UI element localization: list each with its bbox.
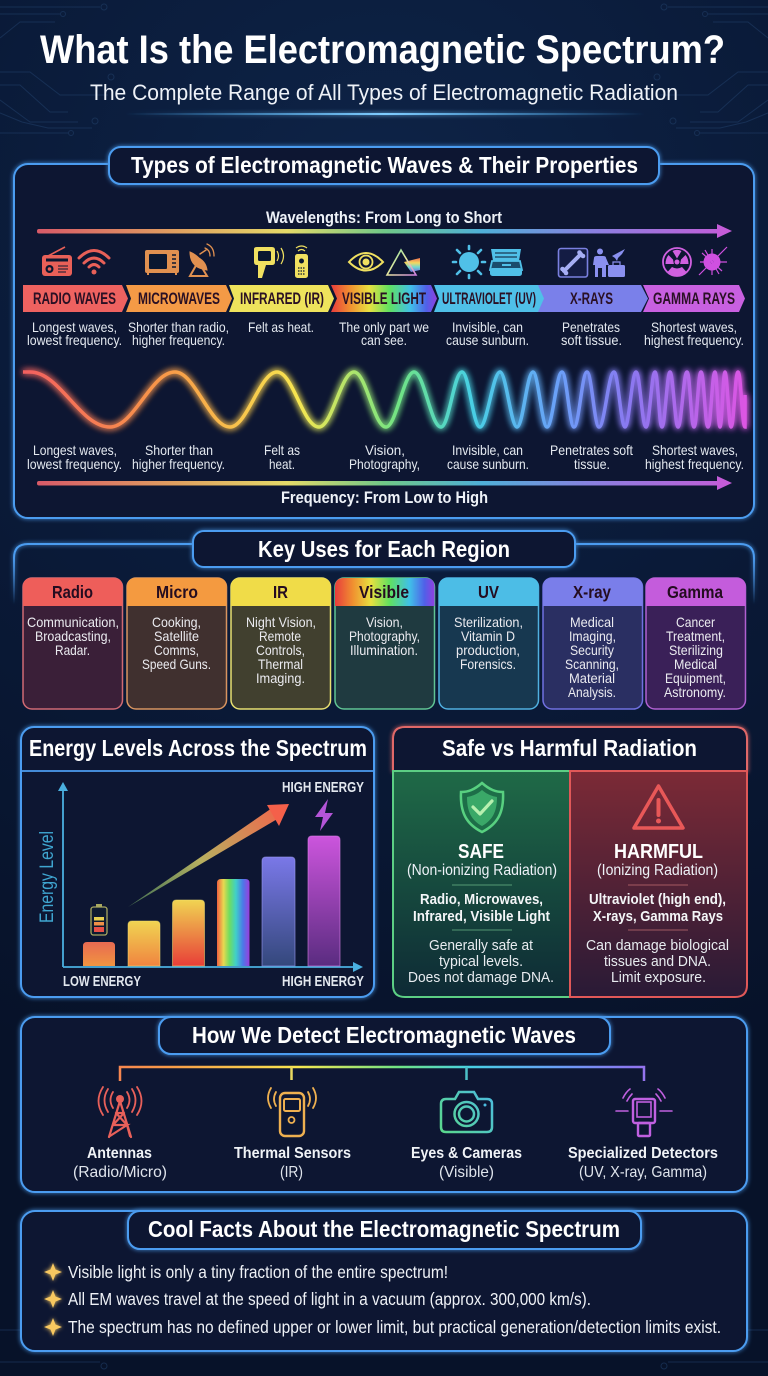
card: infrared: Imaging. bbox=[256, 670, 305, 686]
icon: thermal sensor bbox=[268, 1088, 316, 1136]
rising energy arrow bbox=[128, 804, 289, 907]
spectrum band: x-rays: X-RAYS bbox=[570, 290, 613, 308]
heading: key uses bbox=[193, 531, 575, 567]
spectrum band: microwaves: MICROWAVES bbox=[138, 290, 220, 308]
lower wave descriptions: cause sunburn. bbox=[447, 457, 529, 472]
icon: airport security traveller bbox=[593, 248, 625, 277]
detector: specialized detectors: (UV, X-ray, Gamma) bbox=[579, 1164, 707, 1181]
heading: cool facts: Cool Facts About the Electromagnetic Spectrum bbox=[148, 1216, 620, 1242]
lower wave descriptions: Shortest waves, bbox=[652, 443, 738, 458]
fact one: Visible light is only a tiny fraction of the entire spectrum! bbox=[68, 1262, 448, 1282]
card: uv: production, bbox=[456, 642, 520, 658]
upper wave descriptions: higher frequency. bbox=[132, 333, 225, 348]
upper wave descriptions: The only part we bbox=[339, 320, 429, 335]
bar: infrared bbox=[172, 900, 204, 966]
bar: uv and x-ray bbox=[262, 857, 295, 966]
icon: gamma burst bbox=[699, 247, 727, 275]
icon: infrared camera bbox=[254, 247, 284, 278]
card: radio: Radio bbox=[52, 582, 93, 602]
detector: antennas bbox=[73, 1087, 167, 1181]
card: gamma: Treatment, bbox=[666, 628, 725, 644]
column: harmful: X-rays, Gamma Rays bbox=[593, 908, 723, 925]
lower wave descriptions: Longest waves, bbox=[33, 443, 117, 458]
lower wave descriptions: higher frequency. bbox=[132, 457, 225, 472]
upper wave descriptions: Penetrates bbox=[562, 320, 620, 335]
card: radio: Communication, bbox=[27, 614, 119, 630]
bar: radio bbox=[83, 942, 115, 966]
column: safe: Radio, Microwaves, bbox=[420, 891, 543, 908]
bar: visible bbox=[217, 879, 250, 966]
label: low energy: LOW ENERGY bbox=[63, 973, 141, 990]
card: infrared: Remote bbox=[259, 628, 301, 644]
card: x-ray: Scanning, bbox=[565, 656, 619, 672]
card: uv: Vitamin D bbox=[461, 628, 515, 644]
card: infrared: Night Vision, bbox=[246, 614, 316, 630]
column: harmful: HARMFUL bbox=[614, 840, 703, 863]
spectrum band: radio waves bbox=[23, 285, 128, 312]
title: What Is the Electromagnetic Spectrum? bbox=[40, 28, 725, 72]
heading: energy levels: Energy Levels Across the Spectrum bbox=[29, 735, 367, 761]
card: infrared: IR bbox=[273, 582, 288, 602]
spectrum band: x-rays bbox=[538, 285, 648, 312]
heading: safe vs harmful: Safe vs Harmful Radiation bbox=[442, 735, 697, 761]
card: infrared: Thermal bbox=[258, 656, 303, 672]
spectrum band: infrared bbox=[229, 285, 334, 312]
card: visible bbox=[335, 578, 434, 709]
icon: prism bbox=[387, 250, 420, 275]
spectrum band: gamma rays bbox=[643, 285, 745, 312]
lower wave descriptions bbox=[27, 443, 744, 472]
card: visible: Vision, bbox=[366, 614, 403, 630]
card: x-ray: Imaging, bbox=[569, 628, 616, 644]
upper wave descriptions: lowest frequency. bbox=[27, 333, 122, 348]
panel: energy levels bbox=[21, 727, 374, 997]
bar: micro bbox=[128, 921, 160, 966]
icon: satellite dish bbox=[190, 244, 214, 276]
card: uv bbox=[439, 578, 538, 709]
card: x-ray: Security bbox=[570, 642, 614, 658]
card: x-ray: X-ray bbox=[573, 582, 611, 602]
lower wave descriptions: Felt as bbox=[264, 443, 300, 458]
upper wave descriptions: Shortest waves, bbox=[651, 320, 737, 335]
spectrum band: gamma rays: GAMMA RAYS bbox=[653, 290, 735, 308]
card: visible: Visible bbox=[359, 582, 409, 602]
spectrum band: infrared: INFRARED (IR) bbox=[240, 290, 324, 308]
spectrum band: visible light: VISIBLE LIGHT bbox=[342, 290, 426, 308]
icon: wifi bbox=[79, 250, 109, 274]
card: x-ray bbox=[543, 578, 642, 709]
card: gamma: Cancer bbox=[676, 614, 715, 630]
column: harmful: (Ionizing Radiation) bbox=[597, 862, 718, 879]
upper wave descriptions: Shorter than radio, bbox=[128, 320, 229, 335]
card: gamma bbox=[646, 578, 746, 709]
icon: shield bbox=[461, 783, 503, 832]
icon: battery bbox=[91, 904, 107, 935]
detector: thermal sensors: Thermal Sensors bbox=[234, 1145, 351, 1162]
lower wave descriptions: Penetrates soft bbox=[550, 443, 633, 458]
spectrum band: ultraviolet: ULTRAVIOLET (UV) bbox=[442, 290, 536, 308]
icon: camera bbox=[441, 1092, 492, 1132]
lower wave descriptions: highest frequency. bbox=[645, 457, 744, 472]
circuit decoration left bbox=[0, 4, 114, 1369]
title divider bbox=[125, 113, 645, 115]
lower wave descriptions: heat. bbox=[269, 457, 295, 472]
card: gamma: Equipment, bbox=[665, 670, 726, 686]
card: uv: Sterilization, bbox=[454, 614, 523, 630]
upper wave descriptions: cause sunburn. bbox=[446, 333, 529, 348]
detector: thermal sensors bbox=[234, 1088, 351, 1181]
wave chart bbox=[23, 372, 745, 427]
card: micro: Comms, bbox=[154, 642, 199, 658]
panel: detection bbox=[21, 1017, 747, 1192]
panel: types of waves bbox=[14, 147, 754, 518]
wavelength arrow bbox=[37, 224, 732, 238]
card: micro: Micro bbox=[156, 582, 198, 602]
lower wave descriptions: Photography, bbox=[349, 457, 420, 472]
column: harmful: Ultraviolet (high end), bbox=[589, 891, 726, 908]
heading: types of waves bbox=[109, 147, 659, 184]
lower wave descriptions: lowest frequency. bbox=[27, 457, 122, 472]
bar: gamma bbox=[308, 836, 340, 966]
card: gamma: Gamma bbox=[667, 582, 723, 602]
wavelength label: Wavelengths: From Long to Short bbox=[266, 209, 502, 227]
icon: specialized detector bbox=[616, 1089, 672, 1136]
detector: eyes and cameras bbox=[411, 1092, 522, 1181]
spectrum band: radio waves: RADIO WAVES bbox=[33, 290, 116, 308]
upper wave descriptions: soft tissue. bbox=[561, 333, 622, 348]
axes bbox=[58, 782, 363, 972]
heading: detection: How We Detect Electromagnetic Waves bbox=[192, 1022, 576, 1048]
column: safe bbox=[393, 771, 570, 997]
card: radio bbox=[23, 578, 122, 709]
spectrum band: microwaves bbox=[126, 285, 232, 312]
label: high energy bottom: HIGH ENERGY bbox=[282, 973, 364, 990]
detector: eyes and cameras: (Visible) bbox=[439, 1164, 494, 1181]
connector bracket bbox=[120, 1067, 644, 1081]
icon: warning triangle bbox=[634, 786, 683, 828]
frequency label: Frequency: From Low to High bbox=[281, 489, 488, 507]
upper wave descriptions: highest frequency. bbox=[644, 333, 744, 348]
card: micro: Speed Guns. bbox=[142, 656, 211, 672]
subtitle: The Complete Range of All Types of Electromagnetic Radiation bbox=[90, 80, 678, 105]
detector: antennas: (Radio/Micro) bbox=[73, 1164, 167, 1181]
column: safe: Infrared, Visible Light bbox=[413, 908, 550, 925]
card: uv: Forensics. bbox=[460, 656, 516, 672]
card: gamma: Astronomy. bbox=[664, 684, 726, 700]
column: harmful: Can damage biological bbox=[586, 937, 729, 954]
panel: safe vs harmful bbox=[393, 727, 747, 997]
spectrum band: visible light bbox=[331, 285, 437, 312]
heading: detection bbox=[159, 1017, 610, 1054]
upper wave descriptions bbox=[27, 320, 744, 348]
upper wave descriptions: Longest waves, bbox=[32, 320, 117, 335]
upper wave descriptions: Felt as heat. bbox=[248, 320, 314, 335]
icon: radiation symbol bbox=[663, 248, 691, 276]
column: safe: typical levels. bbox=[439, 953, 523, 970]
lower wave descriptions: Shorter than bbox=[145, 443, 213, 458]
card: micro bbox=[127, 578, 226, 709]
upper wave descriptions: can see. bbox=[361, 333, 407, 348]
column: harmful bbox=[570, 771, 747, 997]
panel: cool facts bbox=[21, 1211, 747, 1351]
card: micro: Cooking, bbox=[152, 614, 201, 630]
icon: antenna bbox=[98, 1087, 142, 1137]
panel: key uses bbox=[14, 531, 754, 709]
detector: specialized detectors bbox=[568, 1089, 718, 1181]
fact two: All EM waves travel at the speed of light in a vacuum (approx. 300,000 km/s). bbox=[68, 1289, 591, 1309]
column: safe: (Non-ionizing Radiation) bbox=[407, 862, 557, 879]
lower wave descriptions: Invisible, can bbox=[452, 443, 523, 458]
label: high energy top: HIGH ENERGY bbox=[282, 779, 364, 796]
card: infrared bbox=[231, 578, 330, 709]
column: safe: Does not damage DNA. bbox=[408, 969, 554, 986]
card: gamma: Medical bbox=[674, 656, 717, 672]
icon: radio bbox=[42, 247, 72, 276]
card: visible: Illumination. bbox=[350, 642, 418, 658]
heading: types of waves: Types of Electromagnetic Waves & Their Properties bbox=[131, 152, 638, 178]
frequency arrow bbox=[37, 476, 732, 490]
card: x-ray: Material bbox=[569, 670, 615, 686]
icon: remote control bbox=[295, 246, 308, 278]
detector: eyes and cameras: Eyes & Cameras bbox=[411, 1145, 522, 1162]
heading: key uses: Key Uses for Each Region bbox=[258, 536, 510, 562]
card: infrared: Controls, bbox=[256, 642, 305, 658]
column: safe: SAFE bbox=[458, 840, 504, 863]
lower wave descriptions: Vision, bbox=[365, 443, 405, 458]
card: gamma: Sterilizing bbox=[669, 642, 723, 658]
heading: cool facts bbox=[128, 1211, 641, 1249]
upper wave descriptions: Invisible, can bbox=[452, 320, 523, 335]
icon: microwave bbox=[145, 250, 179, 275]
card: micro: Satellite bbox=[154, 628, 199, 644]
icon: sun bbox=[453, 246, 485, 278]
card: uv: UV bbox=[478, 582, 499, 602]
column: safe: Generally safe at bbox=[429, 937, 534, 954]
card: x-ray: Analysis. bbox=[568, 684, 616, 700]
detector: specialized detectors: Specialized Detectors bbox=[568, 1145, 718, 1162]
card: radio: Broadcasting, bbox=[35, 628, 111, 644]
axis label: energy level: Energy Level bbox=[37, 831, 58, 923]
card: visible: Photography, bbox=[349, 628, 420, 644]
icon: x-ray bone bbox=[558, 248, 588, 277]
detector: thermal sensors: (IR) bbox=[280, 1164, 303, 1181]
detector: antennas: Antennas bbox=[87, 1145, 152, 1162]
card: radio: Radar. bbox=[55, 642, 90, 658]
icon: lightning bolt bbox=[315, 799, 333, 831]
spectrum band: ultraviolet bbox=[434, 285, 545, 312]
column: harmful: tissues and DNA. bbox=[604, 953, 711, 970]
icon: eye bbox=[349, 253, 383, 270]
icon: tanning bed bbox=[490, 249, 522, 276]
circuit decoration right bbox=[654, 4, 768, 1369]
card: x-ray: Medical bbox=[570, 614, 614, 630]
column: harmful: Limit exposure. bbox=[611, 969, 706, 986]
lower wave descriptions: tissue. bbox=[574, 457, 610, 472]
